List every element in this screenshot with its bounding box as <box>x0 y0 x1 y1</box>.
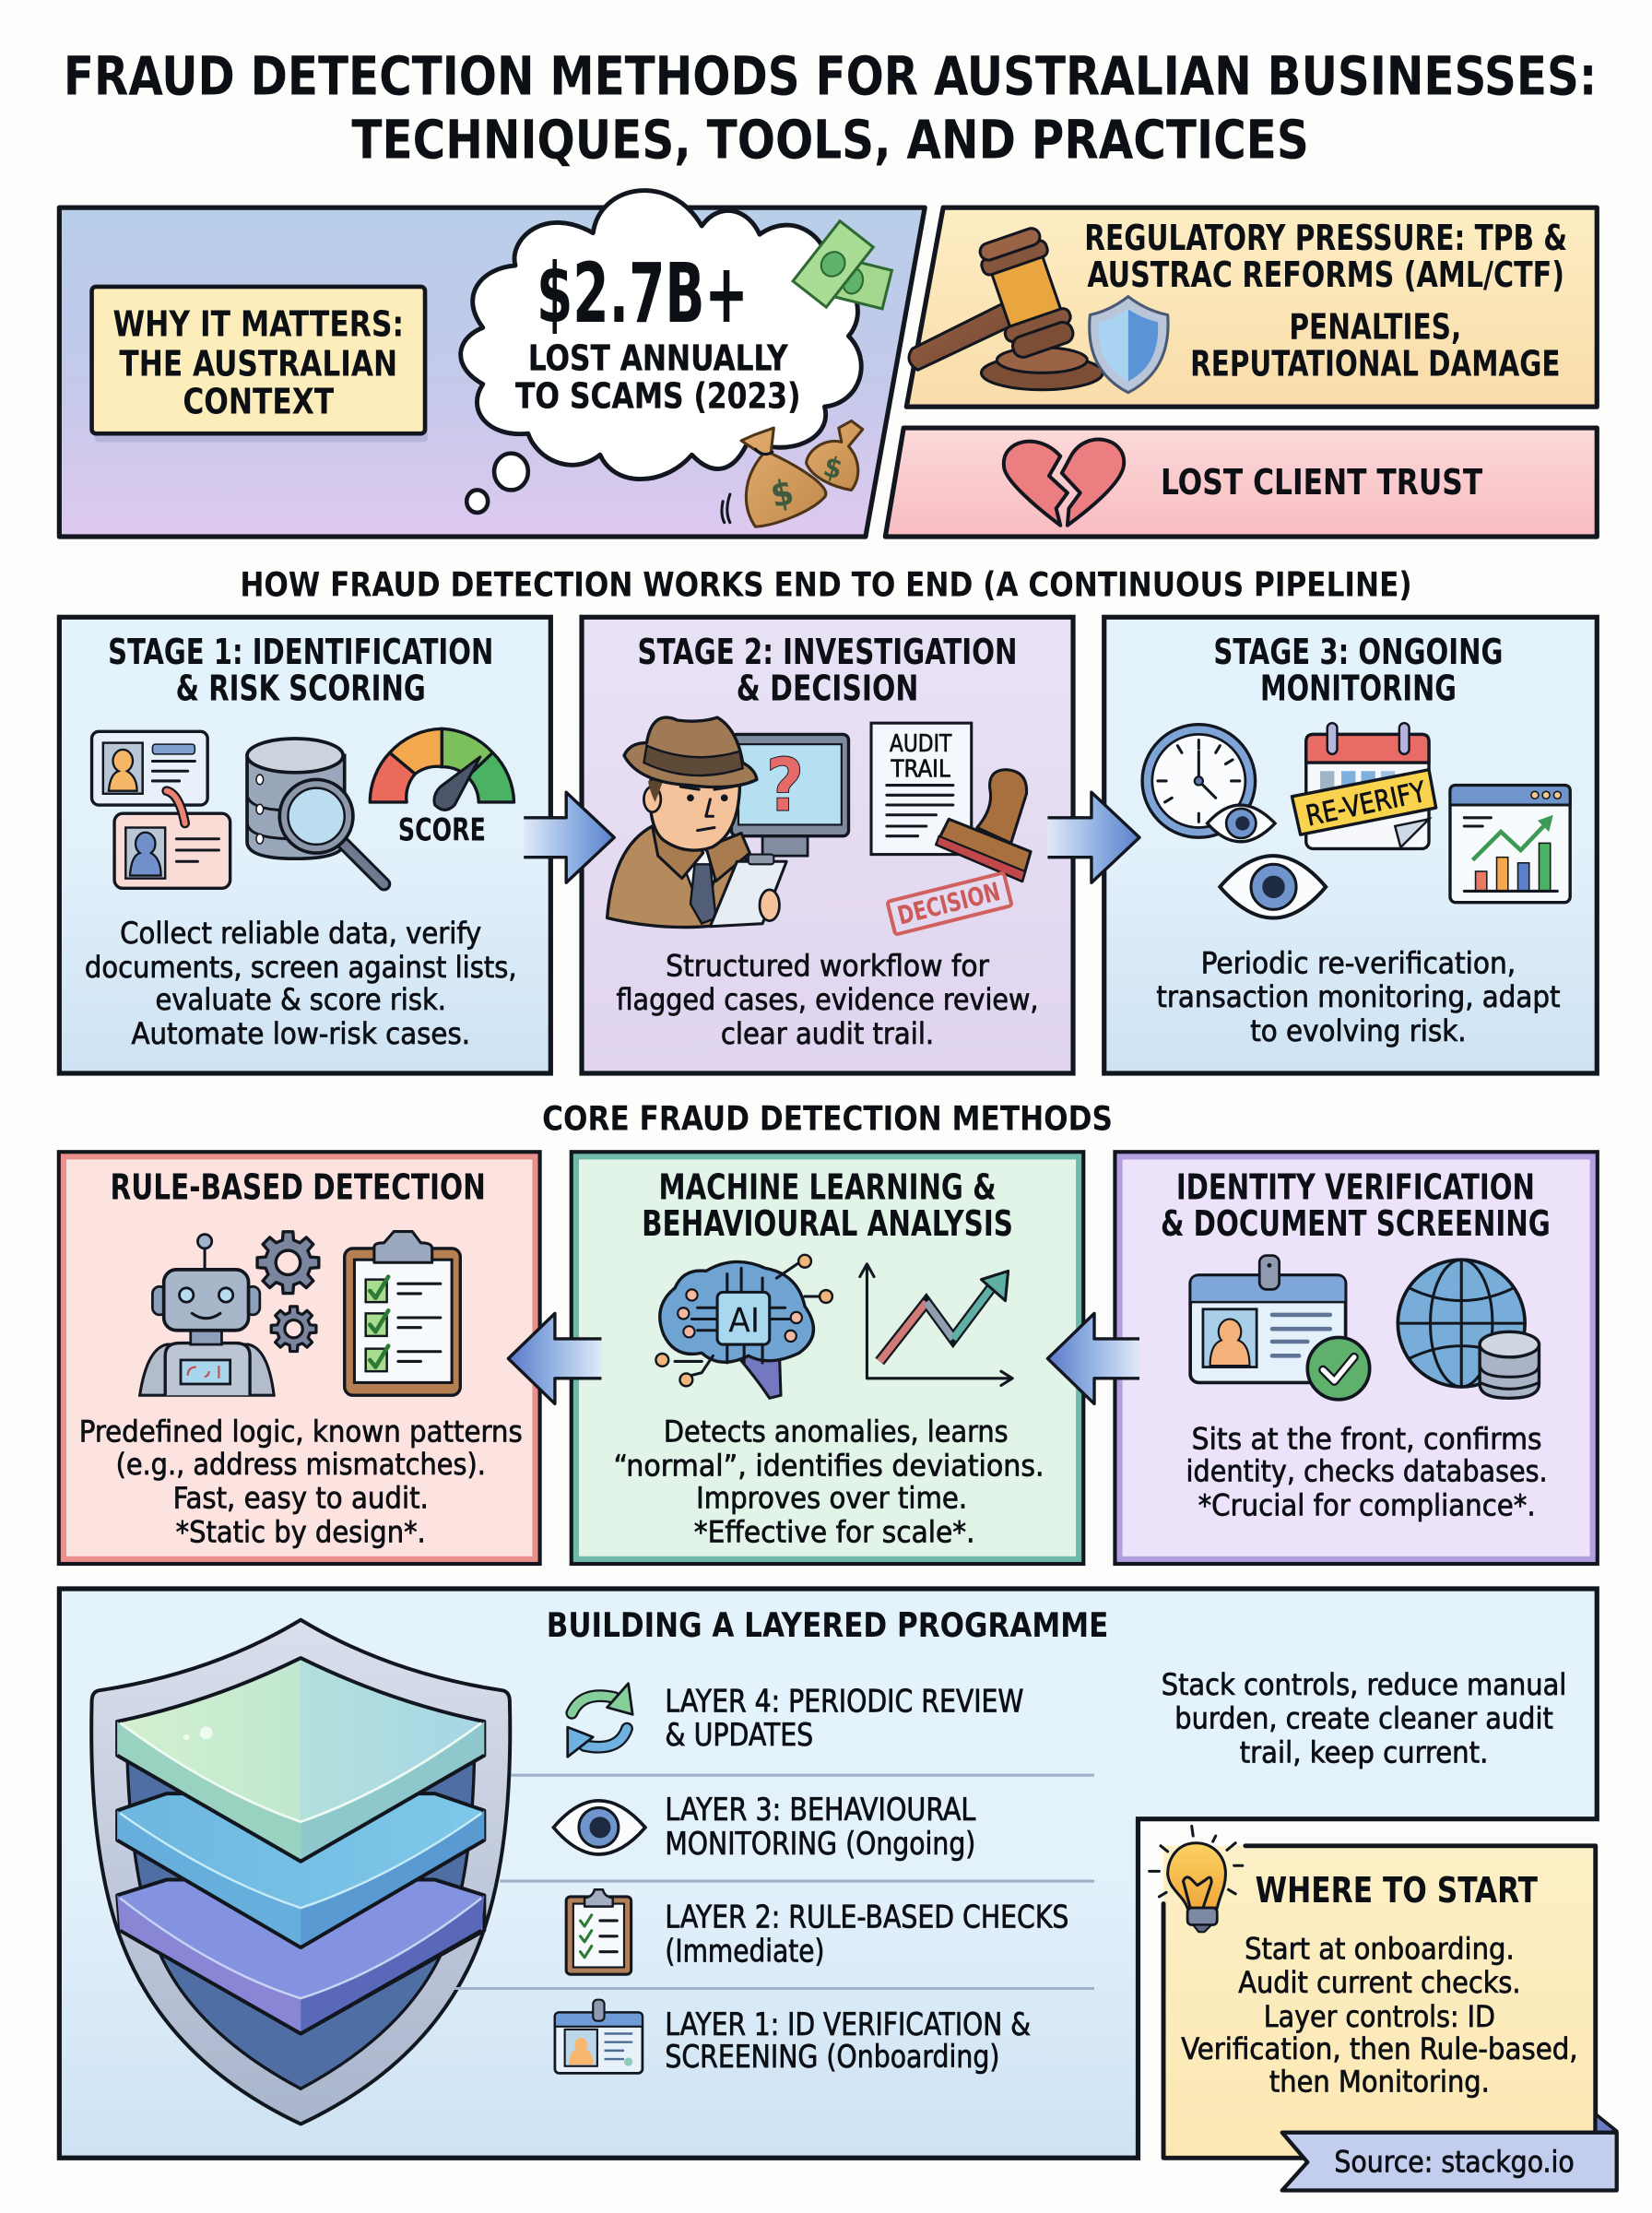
icon: clipboard held by detective <box>710 855 786 927</box>
stage 3 description <box>1156 945 1560 1048</box>
machine learning description: Improves over time. <box>696 1481 967 1516</box>
layer 3 text: LAYER 3: BEHAVIOURAL <box>665 1792 975 1828</box>
rule-based description <box>79 1414 523 1549</box>
stage 3 heading <box>1213 632 1503 710</box>
layer dividers <box>454 1775 1094 1988</box>
icon: gavel <box>909 225 1103 390</box>
stage 3 heading: STAGE 3: ONGOING <box>1213 632 1503 673</box>
layered programme summary <box>1162 1667 1566 1769</box>
machine learning heading: MACHINE LEARNING & <box>659 1166 997 1208</box>
stage 1 description <box>85 916 517 1051</box>
icon: audit trail document: AUDIT <box>890 730 952 758</box>
rule-based description: (e.g., address mismatches). <box>116 1447 486 1482</box>
icon: monitor with question mark <box>731 734 849 856</box>
stage 1 description: documents, screen against lists, <box>85 950 517 985</box>
icon: shield <box>1090 297 1168 393</box>
identity heading: & DOCUMENT SCREENING <box>1161 1203 1551 1245</box>
layer 4 text: LAYER 4: PERIODIC REVIEW <box>665 1683 1023 1719</box>
where to start text: Audit current checks. <box>1238 1965 1521 2000</box>
icon: id badge with check <box>1190 1256 1370 1400</box>
stage 2 heading: & DECISION <box>737 669 918 710</box>
icon: lightbulb <box>1150 1826 1243 1932</box>
source ribbon: Source: stackgo.io <box>1334 2145 1575 2180</box>
heading: core methods: CORE FRAUD DETECTION METHODS <box>542 1098 1113 1138</box>
icon: calendar with re-verify tag <box>1292 723 1436 848</box>
icon: rising line chart <box>860 1264 1012 1385</box>
label: why it matters: CONTEXT <box>183 382 335 423</box>
icon: score gauge: SCORE <box>398 811 486 847</box>
thought cloud with statistic <box>461 191 861 513</box>
big number: $2.7B+ <box>537 246 749 341</box>
machine learning description: *Effective for scale*. <box>694 1514 975 1549</box>
source ribbon <box>1282 2114 1617 2190</box>
panel: regulatory pressure <box>906 207 1597 407</box>
stage 3 description: transaction monitoring, adapt <box>1156 979 1560 1014</box>
rule-based description: *Static by design*. <box>176 1514 426 1549</box>
icon: checklist clipboard <box>345 1232 460 1395</box>
icon: clipboard <box>566 1889 631 1974</box>
arrow: stage 1 to stage 2 <box>524 792 614 882</box>
identity heading <box>1161 1166 1551 1245</box>
regulatory text: AUSTRAC REFORMS (AML/CTF) <box>1087 254 1564 296</box>
where to start text: Layer controls: ID <box>1264 1999 1495 2034</box>
title <box>64 45 1597 172</box>
layer 4 text <box>665 1683 1023 1753</box>
icon: gears <box>257 1232 319 1352</box>
layer 4 row <box>568 1683 1023 1757</box>
layer 2 text <box>665 1899 1068 1969</box>
layer 2 text: (Immediate) <box>665 1933 824 1969</box>
caption <box>515 337 800 418</box>
layer 3 text <box>665 1792 975 1862</box>
machine learning description <box>613 1414 1044 1549</box>
stage 2 description: Structured workflow for <box>666 948 989 983</box>
label: why it matters: THE AUSTRALIAN <box>119 343 397 385</box>
rule-based description: Fast, easy to audit. <box>173 1481 429 1516</box>
icon: money bags: $ <box>820 451 845 487</box>
panel: identity verification <box>1115 1153 1597 1563</box>
panel: building a layered programme <box>59 1589 1597 2158</box>
arrow: stage 2 to stage 3 <box>1047 792 1139 882</box>
stage 2 heading <box>638 632 1018 710</box>
icon: eye <box>553 1801 645 1854</box>
layer 1 text <box>665 2006 1031 2075</box>
layer 4 text: & UPDATES <box>665 1717 813 1753</box>
regulatory text: PENALTIES, <box>1289 307 1461 349</box>
panel: lost client trust <box>885 428 1597 537</box>
stage 2 description: flagged cases, evidence review, <box>617 982 1039 1017</box>
layer 2 row <box>566 1889 1068 1974</box>
icon: robot <box>140 1235 274 1395</box>
regulatory text: REPUTATIONAL DAMAGE <box>1190 343 1560 385</box>
icon: audit trail document <box>871 723 972 855</box>
icon: banknotes <box>793 221 891 309</box>
lost client trust label: LOST CLIENT TRUST <box>1161 462 1483 503</box>
arrow: identity to machine learning <box>1047 1313 1139 1403</box>
layered programme summary: Stack controls, reduce manual <box>1162 1667 1566 1702</box>
icon: calendar with re-verify tag: RE-VERIFY <box>1304 776 1429 833</box>
identity heading: IDENTITY VERIFICATION <box>1176 1166 1535 1208</box>
label: why it matters <box>92 287 428 442</box>
layer 1 text: LAYER 1: ID VERIFICATION & <box>665 2006 1031 2042</box>
shield layer: lower <box>117 1880 484 2033</box>
stage 1 heading <box>108 632 493 710</box>
panel: rule-based detection <box>59 1153 539 1563</box>
icon: id badge <box>555 2000 643 2073</box>
stage 1 description: evaluate & score risk. <box>155 982 446 1017</box>
where to start text: then Monitoring. <box>1269 2064 1490 2099</box>
heading: pipeline: HOW FRAUD DETECTION WORKS END TO END (A CONTINUOUS PIPELINE) <box>240 564 1412 604</box>
layer 3 text: MONITORING (Ongoing) <box>665 1826 975 1862</box>
icon: layered shield <box>91 1620 510 2124</box>
caption: LOST ANNUALLY <box>528 337 789 379</box>
stage 1 description: Automate low-risk cases. <box>131 1016 470 1051</box>
icon: money bags: $ <box>767 471 797 516</box>
machine learning heading: BEHAVIOURAL ANALYSIS <box>642 1203 1013 1245</box>
stage 1 heading: & RISK SCORING <box>176 669 426 710</box>
decision stamp: DECISION <box>894 877 1003 931</box>
shield layer: middle <box>117 1793 484 1947</box>
panel: machine learning <box>572 1153 1083 1563</box>
panel: stage 2 <box>582 617 1073 1073</box>
icon: money bags <box>722 420 863 527</box>
icon: broken heart <box>1004 440 1124 526</box>
stage 2 heading: STAGE 2: INVESTIGATION <box>638 632 1018 673</box>
identity description: *Crucial for compliance*. <box>1198 1487 1536 1522</box>
icon: globe with database <box>1398 1260 1539 1398</box>
stage 3 heading: MONITORING <box>1260 669 1457 710</box>
where to start text: Verification, then Rule-based, <box>1181 2031 1578 2066</box>
where to start heading: WHERE TO START <box>1256 1870 1538 1911</box>
layer 1 text: SCREENING (Onboarding) <box>665 2039 999 2075</box>
stage 3 description: Periodic re-verification, <box>1201 945 1516 980</box>
machine learning description: Detects anomalies, learns <box>664 1414 1009 1450</box>
identity description <box>1186 1421 1548 1522</box>
regulatory text: REGULATORY PRESSURE: TPB & <box>1084 218 1567 259</box>
panel: where to start <box>1150 1826 1617 2190</box>
panel: why it matters <box>59 191 925 537</box>
icon: refresh arrows <box>568 1684 632 1757</box>
layer 1 row <box>555 2000 1031 2075</box>
arrow: machine learning to rule-based <box>508 1313 601 1403</box>
icon: rubber stamp <box>936 770 1031 882</box>
layered programme heading: BUILDING A LAYERED PROGRAMME <box>547 1605 1108 1645</box>
stage 2 description: clear audit trail. <box>721 1016 934 1051</box>
icon: monitor with question mark: ? <box>766 742 804 828</box>
where to start text: Start at onboarding. <box>1245 1931 1515 1966</box>
stage 1 heading: STAGE 1: IDENTIFICATION <box>108 632 493 673</box>
icon: detective <box>608 717 757 928</box>
icon: score gauge <box>370 728 514 847</box>
layer 3 row <box>553 1792 975 1862</box>
icon: database with magnifier <box>247 739 384 884</box>
regulatory text <box>1084 218 1567 385</box>
rule-based description: Predefined logic, known patterns <box>79 1414 523 1450</box>
machine learning heading <box>642 1166 1013 1245</box>
where to start text <box>1181 1931 1578 2099</box>
title: TECHNIQUES, TOOLS, AND PRACTICES <box>351 109 1309 172</box>
icon: AI brain <box>655 1255 832 1398</box>
layered programme summary: burden, create cleaner audit <box>1174 1701 1553 1736</box>
layered programme summary: trail, keep current. <box>1240 1734 1488 1769</box>
caption: TO SCAMS (2023) <box>515 376 800 418</box>
icon: id cards <box>92 731 230 888</box>
stage 1 description: Collect reliable data, verify <box>120 916 481 951</box>
icon: clock <box>1142 725 1256 837</box>
panel: stage 1 <box>59 617 550 1073</box>
stage 3 description: to evolving risk. <box>1250 1013 1467 1048</box>
identity description: Sits at the front, confirms <box>1192 1421 1542 1456</box>
stage 2 description <box>617 948 1039 1051</box>
label: why it matters: WHY IT MATTERS: <box>113 304 404 346</box>
icon: AI brain: AI <box>728 1300 760 1340</box>
machine learning description: “normal”, identifies deviations. <box>613 1449 1044 1484</box>
icon: chart window <box>1450 786 1570 903</box>
identity description: identity, checks databases. <box>1186 1454 1548 1489</box>
panel: stage 3 <box>1104 617 1597 1073</box>
icon: small eye <box>1208 805 1275 842</box>
icon: large eye <box>1220 856 1326 918</box>
icon: audit trail document: TRAIL <box>890 755 950 783</box>
shield layer: top <box>117 1658 484 1862</box>
rule-based heading: RULE-BASED DETECTION <box>110 1166 486 1208</box>
layer 2 text: LAYER 2: RULE-BASED CHECKS <box>665 1899 1068 1935</box>
